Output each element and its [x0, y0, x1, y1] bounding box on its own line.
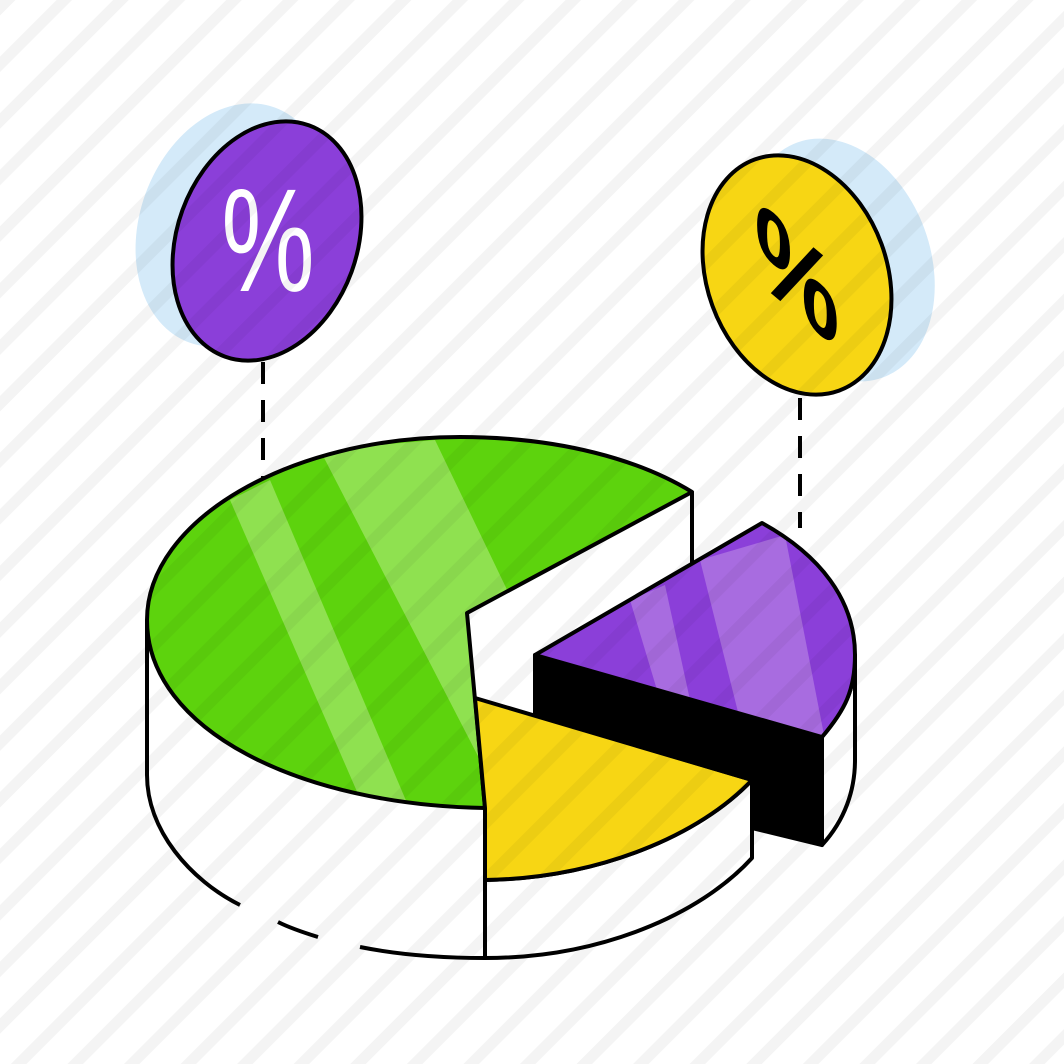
- dashed connector right: [798, 398, 802, 528]
- purple slice: [535, 523, 855, 845]
- pie chart: [147, 437, 855, 958]
- purple percent coin: %: [221, 159, 315, 323]
- purple percent coin: [103, 76, 394, 387]
- dashed connector left: [261, 362, 265, 480]
- yellow percent coin: [670, 112, 967, 421]
- green slice side wall: [147, 492, 692, 958]
- yellow slice: [475, 698, 752, 958]
- yellow percent coin: %: [755, 172, 839, 376]
- green slice top: [147, 437, 692, 810]
